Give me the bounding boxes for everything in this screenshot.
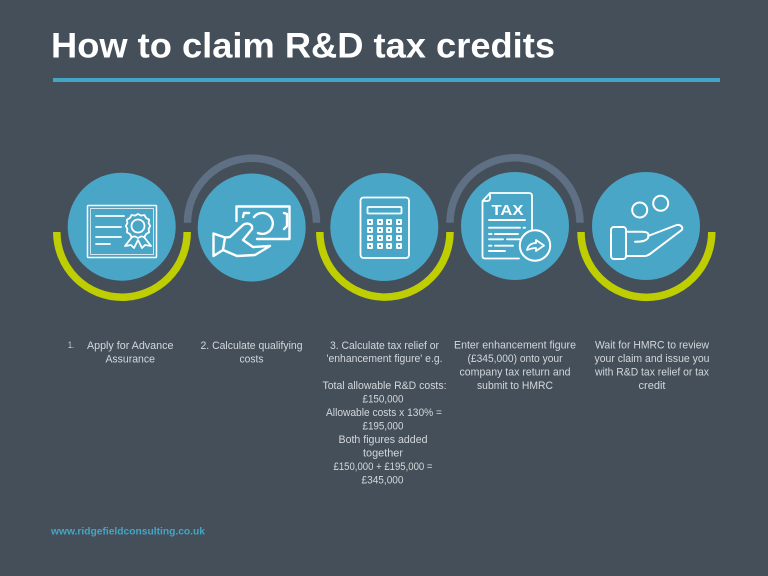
step 3 text: together — [363, 448, 403, 460]
step 1 text: Apply for Advance — [87, 340, 173, 352]
step 3 text: £195,000 — [362, 420, 404, 432]
step 4: circle with tax document icon — [450, 158, 580, 280]
step 1: circle with certificate icon — [57, 173, 187, 297]
step 5 text — [594, 340, 710, 392]
icon: tax document: TAX — [492, 202, 524, 219]
step 3 text: £345,000 — [362, 474, 404, 486]
step 4 text — [454, 340, 576, 392]
step 5 text: with R&D tax relief or tax — [594, 366, 709, 378]
step 1 text: Assurance — [105, 354, 155, 366]
step 4 text: Enter enhancement figure — [454, 340, 576, 352]
step 3 text: £150,000 — [362, 394, 404, 406]
step 5 text: your claim and issue you — [594, 353, 710, 365]
step 3 text: Both figures added — [338, 434, 428, 446]
step 1 text — [68, 340, 173, 366]
step 2 text: costs — [240, 354, 264, 366]
step 3 text: 'enhancement figure' e.g. — [326, 353, 442, 365]
step 5 text: Wait for HMRC to review — [595, 340, 709, 352]
step 3 text: Total allowable R&D costs: — [322, 380, 446, 392]
title underline — [53, 78, 720, 82]
step 5: circle with hand and coins icon — [581, 172, 712, 297]
step 4 text: (£345,000) onto your — [468, 353, 563, 365]
step 4 text: submit to HMRC — [477, 380, 553, 392]
step 1 text: 1. — [68, 340, 74, 351]
step 5 text: credit — [638, 380, 666, 392]
step 3: circle with calculator icon — [320, 173, 450, 297]
icon: hand receiving coins — [611, 196, 682, 259]
step 2 text — [200, 340, 302, 366]
step 2: circle with hand and banknote icon — [188, 158, 316, 282]
step 3 text — [322, 340, 446, 486]
icon: calculator — [360, 198, 409, 258]
step 3 text: 3. Calculate tax relief or — [330, 340, 439, 352]
icon: certificate — [88, 206, 156, 258]
icon: hand holding banknote — [214, 206, 290, 256]
step 4 text: company tax return and — [460, 366, 570, 378]
step 3 text: £150,000 + £195,000 = — [334, 461, 432, 473]
title: How to claim R&D tax credits — [51, 26, 555, 66]
step 3 text: Allowable costs x 130% = — [326, 407, 442, 419]
footer website: www.ridgefieldconsulting.co.uk — [50, 526, 205, 538]
step 2 text: 2. Calculate qualifying — [200, 340, 302, 352]
